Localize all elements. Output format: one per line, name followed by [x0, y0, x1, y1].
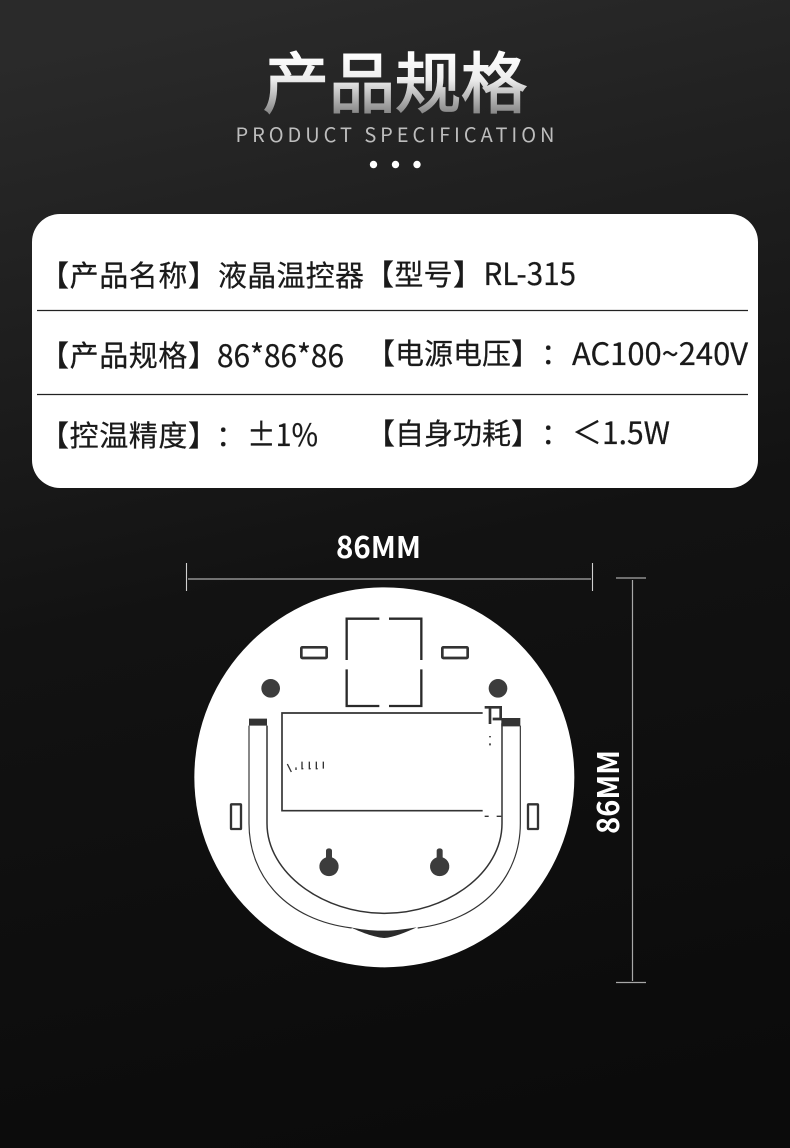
- side slot right: [528, 804, 538, 829]
- colon: ：: [541, 331, 570, 373]
- spec: size: 【产品规格】: [40, 333, 217, 375]
- spec: size value: 86*86*86: [217, 331, 344, 376]
- colon: ：: [216, 413, 245, 455]
- U-shaped channel: [249, 718, 520, 928]
- spec: model value: RL-315: [484, 249, 576, 294]
- panel: specification table: [32, 214, 758, 488]
- dimension line: width: [186, 563, 592, 591]
- display window: [282, 707, 501, 816]
- terminal window outline: [347, 619, 421, 706]
- colon: ：: [541, 411, 570, 453]
- spec: product name: 【产品名称】: [40, 253, 217, 295]
- dimension line: height: [616, 578, 646, 982]
- spec: product name value: 液晶温控器: [218, 253, 364, 295]
- spec: control accuracy: 【控温精度】: [40, 413, 217, 455]
- spec: supply voltage: 【电源电压】: [366, 331, 540, 373]
- decorative three dots: [370, 161, 421, 168]
- keyhole right: [430, 848, 449, 876]
- dimension label: width: 86MM: [336, 523, 421, 567]
- spec: model: 【型号】: [365, 252, 482, 294]
- bottom notch: [351, 927, 417, 938]
- product back view diagram: [194, 587, 574, 967]
- subtitle: PRODUCT SPECIFICATION: [236, 119, 554, 148]
- spec: control accuracy value: ±1%: [247, 410, 318, 455]
- spec: self power consumption: 【自身功耗】: [366, 411, 540, 453]
- side slot left: [231, 804, 241, 829]
- spec: self power consumption value: ＜1.5W: [572, 408, 670, 453]
- screw hole left: [261, 679, 280, 698]
- dimension label: height: 86MM: [584, 750, 628, 834]
- keyhole left: [319, 848, 339, 876]
- clip slot left: [301, 647, 327, 658]
- spec: supply voltage value: AC100~240V: [572, 329, 748, 374]
- clip slot right: [442, 647, 468, 658]
- screw hole right: [489, 679, 507, 698]
- title: 产品规格: [263, 31, 527, 127]
